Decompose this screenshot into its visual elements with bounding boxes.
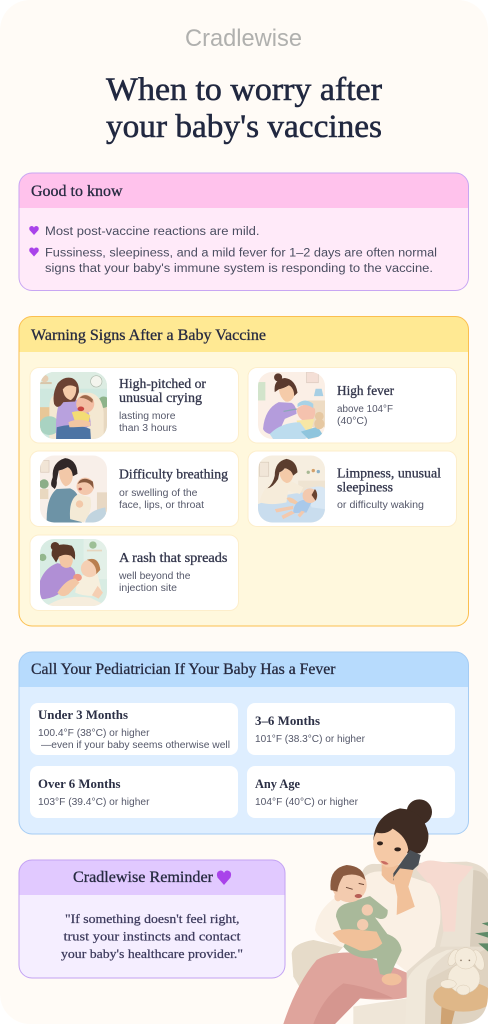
- card heading: sleepiness: [337, 480, 393, 494]
- thumbnail: mother taking temperature: [258, 372, 325, 439]
- panel: warning signs: [19, 316, 469, 626]
- card: over 6 months: [30, 766, 238, 818]
- card description: or difficulty waking: [337, 500, 424, 511]
- brand logo text: Cradlewise: [185, 25, 302, 52]
- card description: [119, 488, 204, 511]
- heading: reminder: Cradlewise Reminder: [73, 869, 214, 886]
- card: under 3 months: 100.4°F (38°C) or higher: [38, 728, 150, 739]
- page corners: [0, 994, 488, 1024]
- icon: purple heart: [29, 226, 39, 235]
- heading: warning signs: Warning Signs After a Baby Vaccine: [31, 327, 266, 344]
- card description: [337, 404, 393, 427]
- title: your baby's vaccines: [106, 109, 382, 145]
- card: over 6 months: 103°F (39.4°C) or higher: [38, 797, 150, 808]
- phone: [393, 850, 421, 883]
- icon: purple heart: [29, 248, 39, 256]
- card: over 6 months: Over 6 Months: [38, 776, 120, 791]
- sleeve: [395, 907, 420, 957]
- quote text: trust your instincts and contact: [64, 928, 241, 944]
- card heading: [337, 466, 441, 494]
- card: high-pitched crying: [30, 368, 238, 443]
- card heading: High fever: [337, 383, 394, 398]
- blanket: [417, 861, 473, 932]
- card description: [118, 571, 191, 594]
- thumbnail: mother with crying baby: [39, 372, 109, 439]
- plant: [475, 922, 488, 953]
- side table: [433, 982, 488, 1024]
- card description: [119, 411, 177, 434]
- card: 3 to 6 months: [247, 703, 455, 755]
- quote text: your baby's healthcare provider.": [61, 946, 243, 961]
- heading: good to know: Good to know: [31, 183, 123, 200]
- card heading: A rash that spreads: [119, 550, 228, 565]
- thumbnail: mother with baby breathing difficulty: [39, 456, 107, 522]
- plush bunny: [440, 948, 487, 995]
- card: any age: 104°F (40°C) or higher: [255, 797, 359, 808]
- card description: (40°C): [337, 416, 368, 427]
- neck: [382, 865, 402, 885]
- card: rash: [30, 535, 238, 610]
- card description: lasting more: [119, 411, 176, 422]
- bullet text: normal signs: Fussiness, sleepiness, and a mild fever for 1–2 days are often normal: [45, 248, 437, 260]
- eyes and mouth: [377, 841, 401, 865]
- card: under 3 months: —even if your baby seems otherwise well: [41, 740, 230, 751]
- panel: call your pediatrician: [19, 652, 469, 834]
- panel: good to know: [19, 173, 469, 291]
- face: [373, 829, 408, 867]
- card description: or swelling of the: [119, 488, 198, 499]
- card: difficulty breathing: [30, 451, 238, 526]
- heading: pediatrician: Call Your Pediatrician If Your Baby Has a Fever: [31, 661, 336, 678]
- armchair: [292, 862, 488, 1024]
- title: [106, 72, 382, 145]
- illustration: mother on phone holding baby in armchair: [283, 799, 488, 1024]
- card heading: unusual crying: [119, 390, 202, 405]
- card heading: Limpness, unusual: [337, 466, 441, 480]
- card: 3 to 6 months: 3–6 Months: [255, 713, 320, 728]
- title: When to worry after: [106, 72, 382, 108]
- icon: purple heart: [217, 870, 231, 885]
- card description: face, lips, or throat: [119, 500, 204, 511]
- card: high fever: [248, 368, 456, 443]
- card description: injection site: [119, 583, 177, 594]
- sweater: [315, 871, 440, 972]
- bullet text: mild reactions: Most post-vaccine reactions are mild.: [45, 226, 260, 238]
- quote text: [61, 911, 243, 961]
- baby: [330, 865, 402, 985]
- card heading: Difficulty breathing: [119, 466, 228, 482]
- card: any age: Any Age: [255, 776, 300, 791]
- card description: than 3 hours: [119, 423, 177, 434]
- card: 3 to 6 months: 101°F (38.3°C) or higher: [255, 734, 366, 745]
- card: under 3 months: Under 3 Months: [38, 707, 128, 722]
- card: any age: [247, 766, 455, 818]
- hair back: [373, 799, 432, 853]
- panel: cradlewise reminder: [19, 860, 285, 978]
- bullet text: normal signs: signs that your baby's immune system is responding to the vaccine.: [45, 263, 433, 275]
- card: limpness: [248, 451, 456, 526]
- thumbnail: mother checking sleeping baby: [258, 456, 325, 522]
- card description: well beyond the: [118, 571, 191, 582]
- card heading: High-pitched or: [119, 376, 207, 391]
- bullet text: normal signs: [45, 248, 437, 275]
- legs: [283, 952, 407, 1024]
- card: under 3 months: [30, 703, 238, 755]
- hand supporting baby: [333, 929, 382, 951]
- thumbnail: mother checking baby rash: [39, 539, 107, 606]
- quote text: "If something doesn't feel right,: [65, 911, 240, 926]
- arm holding phone: [393, 868, 415, 915]
- card heading: [119, 376, 207, 405]
- card description: above 104°F: [337, 404, 393, 415]
